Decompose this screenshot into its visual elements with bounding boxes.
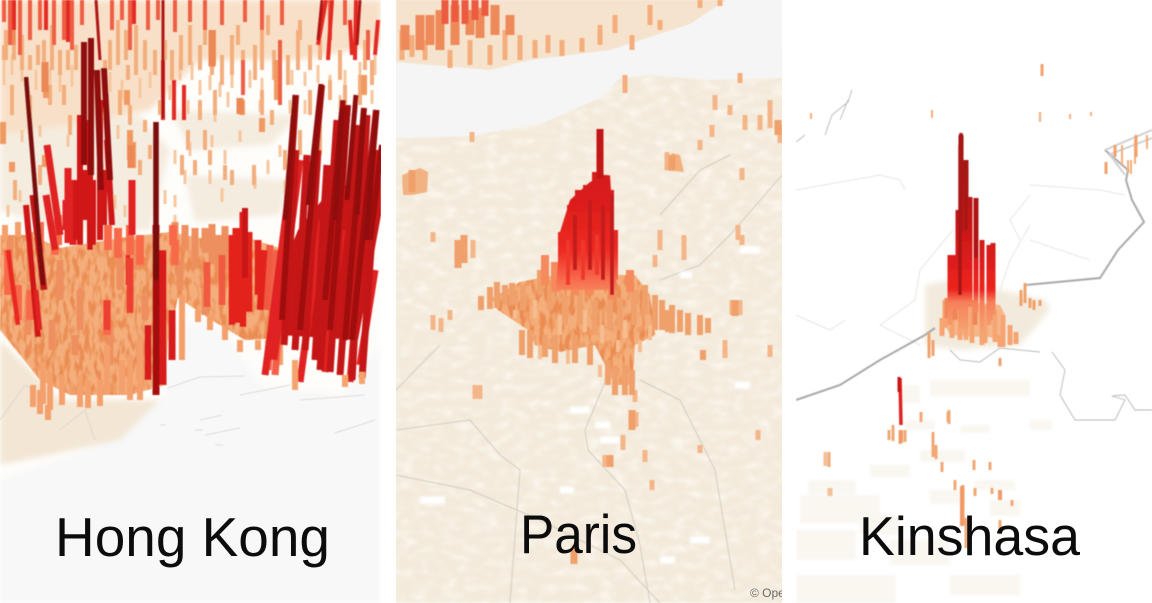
city base orange: [945, 300, 1005, 338]
coastline outlines: [0, 376, 375, 445]
central red tower: [556, 175, 617, 290]
red tower: [950, 135, 993, 340]
background bars: [0, 0, 382, 420]
attribution: © OpenStreetMap: [750, 586, 847, 600]
panel: Paris: [396, 0, 782, 603]
label: Hong Kong: Hong Kong: [55, 506, 330, 568]
far shore bars: [402, 0, 740, 93]
lighter specks: [420, 250, 760, 560]
land background: [390, 0, 790, 603]
sea: [396, 0, 782, 138]
main orange mass: [0, 232, 285, 395]
Congo river: [796, 150, 1144, 400]
sea and land background: [0, 0, 381, 468]
white background: [796, 0, 1152, 603]
far shore: [396, 0, 726, 70]
center bar: [148, 250, 172, 385]
small bright bars: [8, 250, 130, 325]
dark winding border: [796, 90, 1152, 420]
outlying bars: [826, 410, 1012, 548]
city halo: [925, 280, 1050, 350]
label: Kinshasa: Kinshasa: [859, 505, 1080, 567]
outlying towns: [433, 95, 780, 563]
small orange bars: [811, 110, 1147, 174]
patchy beige cells: [796, 380, 1052, 603]
secondary red peak: [900, 378, 901, 425]
right cluster: [280, 175, 381, 340]
tall thin dark bars, far left: [26, 205, 38, 337]
orange bars in front of right cluster: [295, 360, 362, 390]
panel: Hong Kong: [0, 0, 381, 468]
middle red group: [207, 245, 275, 310]
roads and rivers: [396, 155, 782, 603]
label: Paris: Paris: [520, 503, 637, 565]
central orange mass: [492, 275, 655, 385]
panel: Kinshasa: [796, 63, 1152, 602]
cluster of dark red bars, left: [46, 145, 132, 250]
thin lines: [796, 175, 1125, 345]
